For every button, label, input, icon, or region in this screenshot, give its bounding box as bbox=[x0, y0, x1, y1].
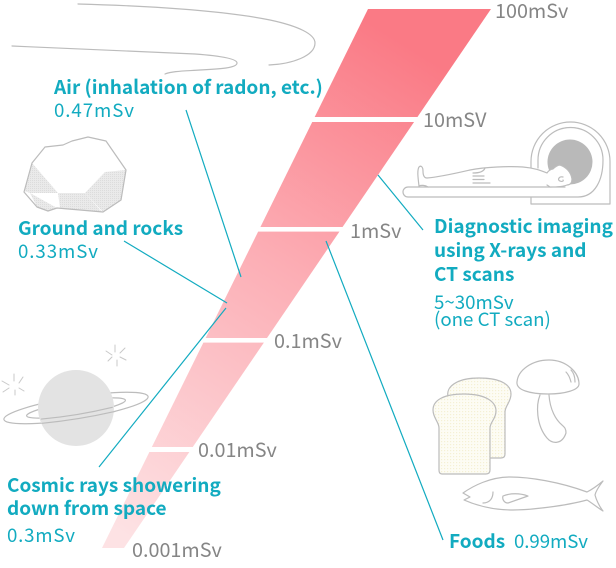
callout: cosmic rays: Cosmic rays showering bbox=[7, 471, 221, 498]
callout: ground and rocks: 0.33mSv bbox=[18, 237, 98, 264]
icon: rock bbox=[24, 137, 126, 212]
callout: ground and rocks bbox=[18, 214, 227, 303]
callout: cosmic rays: 0.3mSv bbox=[7, 521, 75, 548]
icon: fish bbox=[463, 477, 603, 511]
callout: foods: Foods bbox=[449, 527, 505, 554]
callout: air bbox=[53, 73, 323, 277]
callout: foods: 0.99mSv bbox=[514, 527, 588, 554]
callout: diagnostic imaging: CT scans bbox=[434, 260, 514, 287]
scale labels: 0.01mSv bbox=[198, 434, 278, 463]
icon: sparkles bbox=[2, 345, 126, 395]
icon: bread bbox=[433, 378, 511, 474]
icon: air swirl bbox=[12, 4, 315, 74]
callout: diagnostic imaging: 5~30mSv bbox=[434, 288, 514, 315]
scale labels: 0.1mSv bbox=[274, 325, 343, 354]
icon: mushroom bbox=[517, 360, 579, 442]
scale labels bbox=[132, 0, 569, 563]
radiation scale wedge bbox=[100, 9, 491, 548]
callout: air: 0.47mSv bbox=[54, 96, 134, 123]
callout: diagnostic imaging: using X-rays and bbox=[434, 236, 587, 263]
callout: cosmic rays: down from space bbox=[7, 494, 167, 521]
callout: foods bbox=[326, 241, 588, 554]
icon: CT scanner with patient bbox=[403, 122, 610, 204]
callout: cosmic rays bbox=[7, 308, 226, 548]
callout: diagnostic imaging bbox=[378, 175, 614, 332]
scale labels: 0.001mSv bbox=[132, 534, 223, 563]
callout: diagnostic imaging: (one CT scan) bbox=[434, 305, 551, 332]
scale labels: 1mSv bbox=[350, 215, 402, 244]
callout: air: Air (inhalation of radon, etc.) bbox=[53, 73, 323, 100]
icon: planet bbox=[2, 370, 150, 446]
callout: diagnostic imaging: Diagnostic imaging bbox=[434, 212, 614, 239]
scale labels: 10mSV bbox=[423, 104, 487, 133]
callout: ground and rocks: Ground and rocks bbox=[18, 214, 183, 241]
